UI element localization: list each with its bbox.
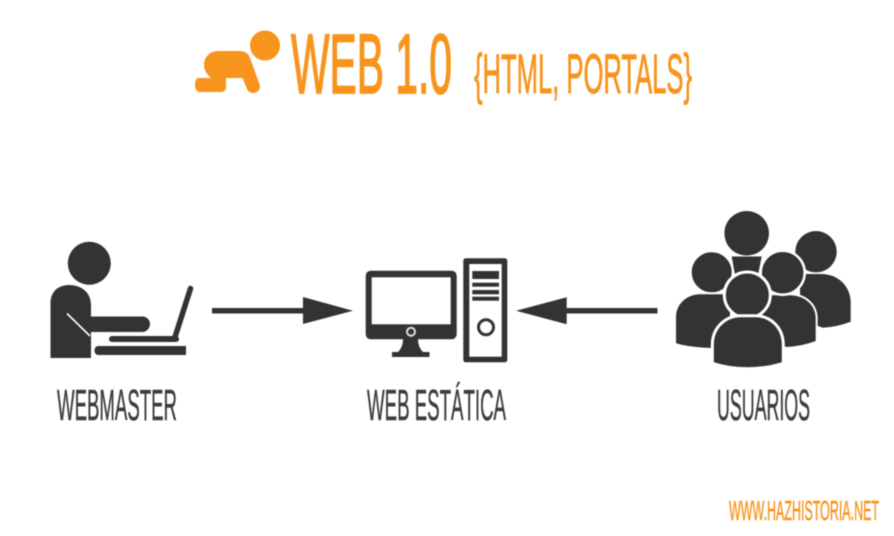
icon: computer tower: [463, 258, 507, 362]
icon: webmaster at laptop: [50, 242, 190, 358]
infographic: WEB 1.0: [291, 17, 452, 111]
infographic: WEBMASTER: [57, 381, 177, 430]
icon: crawling baby: [195, 30, 280, 93]
infographic: WEB ESTÁTICA: [367, 381, 506, 430]
arrow: users to static web: [516, 297, 658, 324]
icon: group of users: [676, 211, 851, 369]
icon: desktop monitor: [366, 271, 457, 357]
arrow: webmaster to static web: [212, 297, 353, 324]
